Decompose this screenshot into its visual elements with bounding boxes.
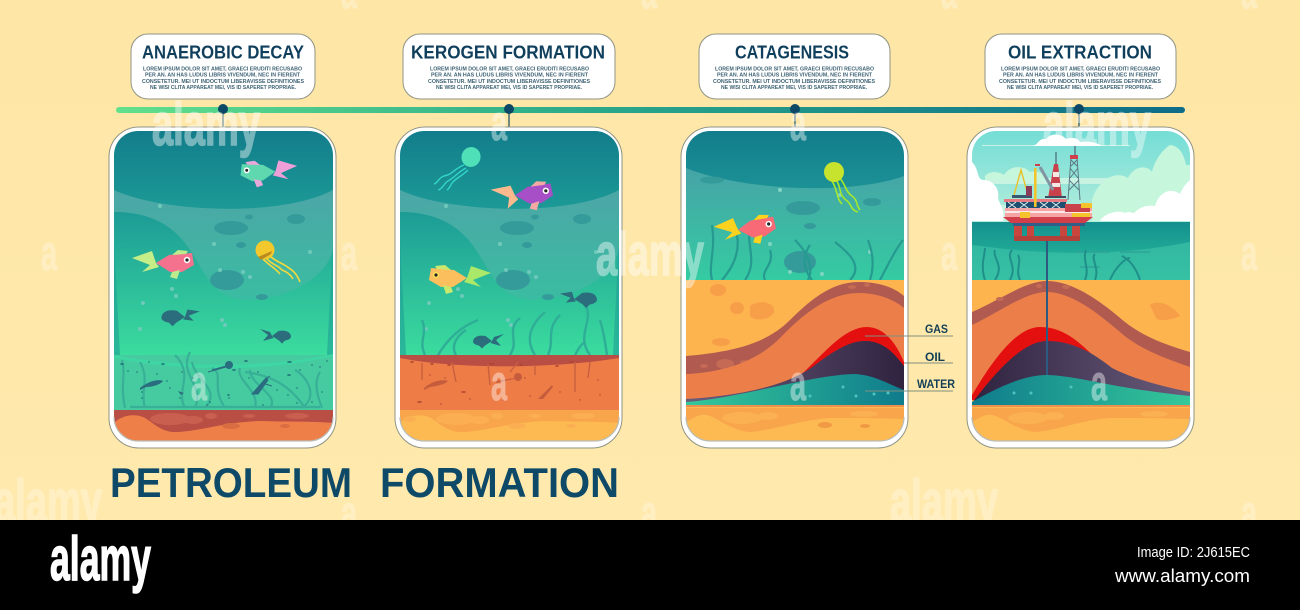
watermarks on panels: alamy <box>152 91 260 158</box>
footer bar <box>0 520 1300 610</box>
fish: pink and yellow-green <box>132 250 194 279</box>
brown rock band <box>686 282 904 374</box>
card: kerogen formation: KEROGEN FORMATION <box>411 42 605 62</box>
watermarks on panels: a <box>1091 355 1108 411</box>
silhouette fish 1 <box>161 310 200 326</box>
card: anaerobic decay: ANAEROBIC DECAY <box>142 42 304 62</box>
fish: yellow <box>429 265 491 294</box>
rock layers <box>114 410 333 442</box>
card: oil extraction: CONSETETUR. MEI UT INDOCTUM LIBERAVISSE DEFINITIONES <box>999 79 1161 85</box>
footer bar: alamy <box>50 525 151 594</box>
panel: catagenesis <box>681 127 908 448</box>
watermarks on background: a <box>341 225 358 281</box>
card: kerogen formation: PER AN. AN HAS LUDUS LIBRIS VIVENDUM, NEC IN FIERENT <box>431 73 589 79</box>
watermarks on panels: a <box>191 355 208 411</box>
watermarks on background: alamy <box>890 468 998 535</box>
fish: purple <box>490 180 554 213</box>
sea grass <box>983 248 1140 280</box>
watermarks on panels: alamy <box>1043 91 1151 158</box>
fish: green and pink <box>240 160 297 188</box>
watermarks on panels: a <box>491 95 508 151</box>
watermarks on background: a <box>41 225 58 281</box>
footer bar: www.alamy.com <box>1114 566 1250 586</box>
sea grass <box>422 305 607 355</box>
silhouette fish 3 <box>560 292 597 308</box>
watermarks on background: a <box>941 225 958 281</box>
labels: gas oil water <box>865 322 955 391</box>
card: anaerobic decay: PER AN. AN HAS LUDUS LIBRIS VIVENDUM, NEC IN FIERENT <box>145 73 301 79</box>
panel: oil extraction <box>967 127 1194 448</box>
card: oil extraction <box>985 34 1176 99</box>
card: anaerobic decay <box>131 34 315 99</box>
drill pipe <box>1046 240 1048 375</box>
card: kerogen formation: CONSETETUR. MEI UT INDOCTUM LIBERAVISSE DEFINITIONES <box>428 79 590 85</box>
timeline <box>116 104 1185 127</box>
silhouette fish 4 <box>473 334 504 348</box>
card: oil extraction: NE WISI CLITA APPAREAT MEI, VIS ID SAPERET PROPRIAE. <box>1007 85 1153 91</box>
title: FORMATION <box>380 459 619 506</box>
title: PETROLEUM <box>110 459 352 506</box>
orange rock layer <box>686 293 904 400</box>
footer bar: Image ID: 2J615EC <box>1137 544 1250 561</box>
sea <box>972 222 1190 280</box>
watermarks on background: a <box>341 485 358 541</box>
yellow rock layer <box>400 410 619 442</box>
gas layer <box>972 327 1102 400</box>
panel: anaerobic decay <box>109 127 336 448</box>
water layer <box>686 374 904 406</box>
fossil: jellyfish <box>208 361 233 372</box>
sand layer <box>972 280 1190 406</box>
card: kerogen formation: NE WISI CLITA APPAREAT MEI, VIS ID SAPERET PROPRIAE. <box>436 85 582 91</box>
watermarks on panels: a <box>790 355 807 411</box>
fossils in sediment <box>424 373 553 399</box>
water layer <box>972 375 1190 406</box>
jellyfish: lime <box>824 162 860 212</box>
sea floor sediment <box>114 352 333 411</box>
oil layer <box>972 341 1190 410</box>
bottom rock layer <box>686 405 904 442</box>
panel: kerogen formation <box>395 127 622 448</box>
clouds <box>972 134 1190 221</box>
fish: pink and yellow <box>714 214 776 244</box>
card: catagenesis <box>699 34 890 99</box>
orange sediment layer <box>400 355 619 411</box>
sky <box>972 131 1190 223</box>
silhouette fish 2 <box>260 329 291 344</box>
gas layer <box>803 327 904 373</box>
card: anaerobic decay: LOREM IPSUM DOLOR SIT AMET, GRAECI ERUDITI RECUSABO <box>143 66 302 72</box>
watermarks on panels: a <box>491 355 508 411</box>
card: kerogen formation: LOREM IPSUM DOLOR SIT AMET, GRAECI ERUDITI RECUSABO <box>430 66 589 72</box>
card: catagenesis: LOREM IPSUM DOLOR SIT AMET, GRAECI ERUDITI RECUSABO <box>715 66 874 72</box>
title <box>110 459 619 506</box>
card: oil extraction: OIL EXTRACTION <box>1008 42 1152 62</box>
sea grass <box>711 225 903 280</box>
watermarks on background: a <box>641 485 658 541</box>
watermarks on panels <box>152 91 1151 411</box>
labels: gas oil water: OIL <box>925 350 945 364</box>
card: catagenesis: NE WISI CLITA APPAREAT MEI, VIS ID SAPERET PROPRIAE. <box>721 85 867 91</box>
watermarks on panels: a <box>790 95 807 151</box>
card: oil extraction: LOREM IPSUM DOLOR SIT AMET, GRAECI ERUDITI RECUSABO <box>1001 66 1160 72</box>
card: anaerobic decay: NE WISI CLITA APPAREAT MEI, VIS ID SAPERET PROPRIAE. <box>150 85 296 91</box>
fossil: shrimp <box>252 376 272 394</box>
card: catagenesis: CATAGENESIS <box>735 42 849 62</box>
fossil: small fish <box>140 380 163 390</box>
oil layer <box>686 341 904 405</box>
card: anaerobic decay: CONSETETUR. MEI UT INDOCTUM LIBERAVISSE DEFINITIONES <box>142 79 304 85</box>
brown rock band <box>972 281 1190 367</box>
oil rig <box>1003 146 1093 241</box>
jellyfish: yellow <box>256 240 300 282</box>
watermarks on panels: alamy <box>596 221 704 288</box>
card: kerogen formation <box>403 34 615 99</box>
labels: gas oil water: GAS <box>925 322 948 336</box>
jellyfish: teal <box>434 144 483 190</box>
watermarks on background: a <box>1241 485 1258 541</box>
sand layer <box>686 280 904 356</box>
orange rock layer <box>972 292 1190 400</box>
card: catagenesis: PER AN. AN HAS LUDUS LIBRIS VIVENDUM, NEC IN FIERENT <box>717 73 873 79</box>
labels: gas oil water: WATER <box>917 377 955 391</box>
card: oil extraction: PER AN. AN HAS LUDUS LIBRIS VIVENDUM, NEC IN FIERENT <box>1003 73 1159 79</box>
watermarks on background: a <box>1241 225 1258 281</box>
bottom rock layer <box>972 405 1190 442</box>
card: catagenesis: CONSETETUR. MEI UT INDOCTUM LIBERAVISSE DEFINITIONES <box>713 79 875 85</box>
